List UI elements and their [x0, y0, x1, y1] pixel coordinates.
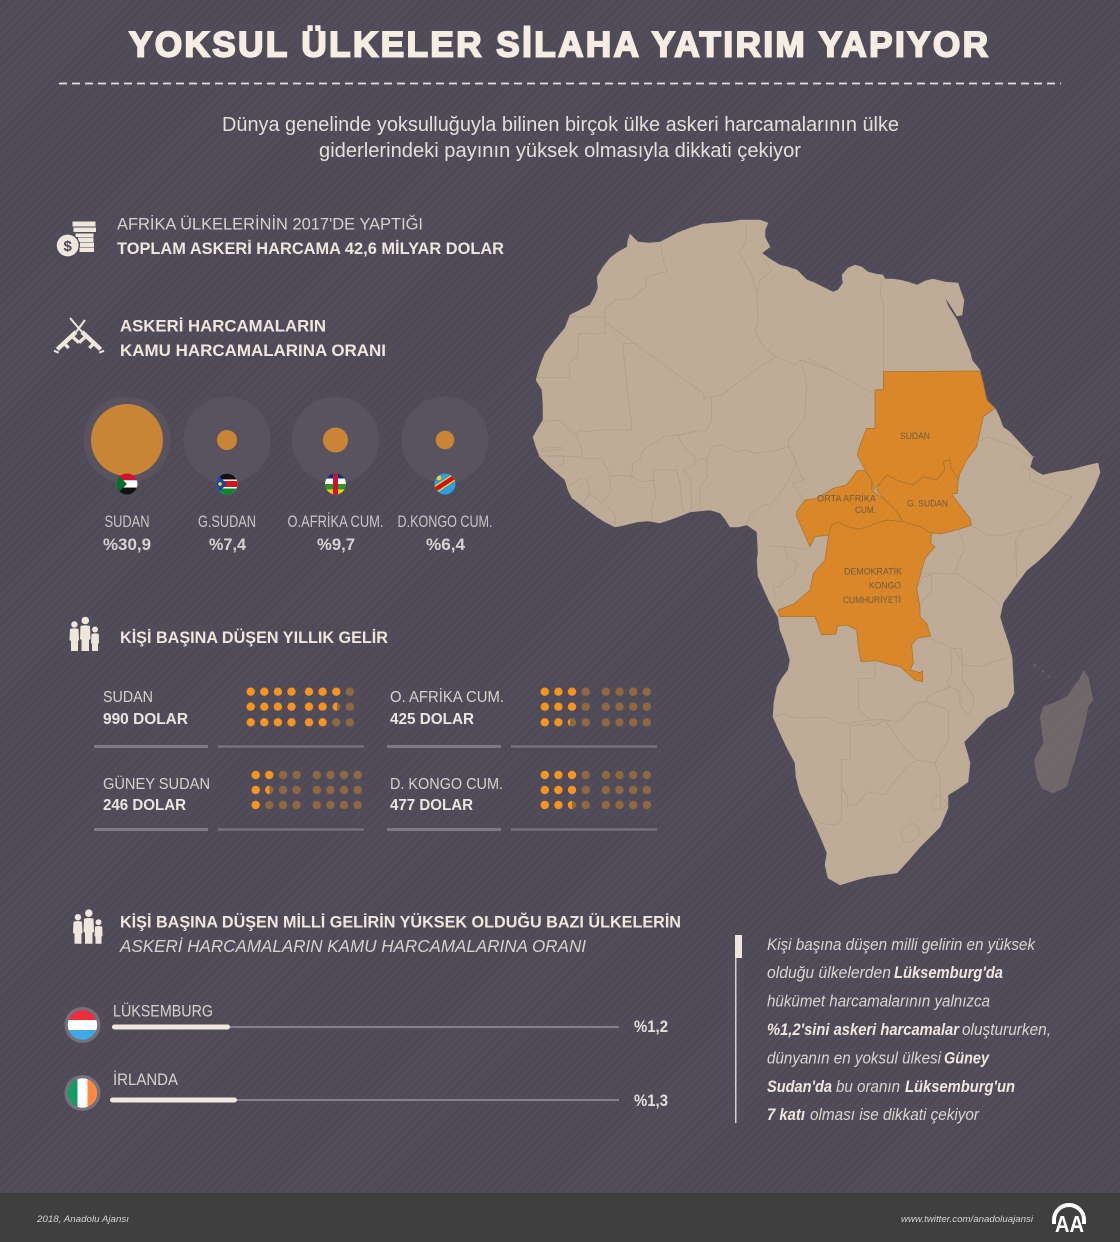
bubble labels: [104, 512, 492, 531]
callout: oluştururken,: [962, 1020, 1051, 1039]
icon: people: [70, 617, 99, 651]
income: Sudan: [94, 688, 364, 748]
label: G. Sudan: G. SUDAN: [907, 498, 948, 508]
map of Africa: [533, 220, 1100, 885]
country: Sudan: [857, 371, 995, 490]
total spending text: [117, 214, 504, 258]
country: South Sudan: [877, 460, 972, 534]
callout: %1,2'sini askeri harcamalar: [767, 1020, 960, 1039]
label: Sudan: SUDAN: [900, 431, 930, 441]
Africa landmass: [533, 220, 1100, 885]
intro text: [222, 114, 899, 162]
central and east africa borders: [770, 278, 1072, 605]
income: DR Congo: [387, 771, 657, 831]
callout: olduğu ülkelerden: [767, 963, 891, 982]
title: YOKSUL ÜLKELER SİLAHA YATIRIM YAPIYOR: [129, 26, 988, 64]
footer: www.twitter.com/anadoluajansi: [901, 1214, 1034, 1225]
dot chart: Sudan: [246, 688, 354, 726]
bar: Ireland: %1,3: [634, 1092, 668, 1110]
heading: high income countries: ASKERİ HARCAMALARIN KAMU HARCAMALARINA ORANI: [119, 936, 586, 956]
label: DR Congo: DEMOKRATİK: [844, 566, 902, 576]
icon: AA logo: AA: [1055, 1211, 1084, 1237]
income: Central African Republic: O. AFRİKA CUM.: [390, 687, 504, 706]
flag: DR Congo: [434, 474, 456, 494]
callout: [735, 935, 1051, 1124]
callout: Sudan'da: [767, 1077, 832, 1096]
label: Orta Afrika Cum.: CUM.: [855, 505, 876, 515]
bubble: South Sudan: [184, 396, 270, 484]
heading: high income countries: KİŞİ BAŞINA DÜŞEN MİLLİ GELİRİN YÜKSEK OLDUĞU BAZI ÜLKELERİN: [120, 912, 681, 932]
bubble: Central African Republic: [292, 396, 379, 484]
bubble values: [103, 536, 466, 554]
heading: military spending ratio: KAMU HARCAMALARINA ORANI: [120, 341, 386, 360]
heading: military spending ratio: [120, 316, 386, 360]
income: Sudan: SUDAN: [103, 689, 153, 706]
bubble values: %30,9: [103, 536, 151, 554]
bar: Ireland: [64, 1070, 668, 1111]
icon: coins: [56, 222, 96, 257]
flag: Ireland: [64, 1075, 100, 1111]
income: South Sudan: [94, 771, 364, 831]
bar: Ireland: İRLANDA: [113, 1070, 178, 1089]
total spending text: AFRİKA ÜLKELERİNİN 2017'DE YAPTIĞI: [117, 214, 423, 234]
flag: Luxembourg: [64, 1007, 100, 1043]
income: Central African Republic: [387, 687, 657, 748]
southern africa borders: [774, 638, 1012, 843]
dot chart: South Sudan: [252, 771, 362, 809]
income: South Sudan: 246 DOLAR: [103, 797, 186, 814]
label: Orta Afrika Cum.: ORTA AFRİKA: [817, 494, 876, 504]
dot chart: Central African Republic: [541, 688, 651, 726]
callout: Güney: [944, 1048, 990, 1068]
map labels: [817, 431, 948, 605]
label: Orta Afrika Cum.: [817, 494, 876, 515]
callout: bu oranın: [836, 1077, 900, 1096]
total spending text: TOPLAM ASKERİ HARCAMA 42,6 MİLYAR DOLAR: [117, 239, 504, 258]
income: Central African Republic: 425 DOLAR: [390, 711, 474, 728]
bubble: Sudan: [84, 396, 170, 484]
income: South Sudan: GÜNEY SUDAN: [103, 775, 210, 793]
heading: military spending ratio: ASKERİ HARCAMALARIN: [120, 316, 326, 336]
income: DR Congo: 477 DOLAR: [390, 797, 473, 814]
intro text: Dünya genelinde yoksulluğuyla bilinen birçok ülke askeri harcamalarının ülke: [222, 114, 899, 136]
bar: Luxembourg: [64, 1002, 668, 1043]
bubble values: %9,7: [317, 536, 355, 554]
heading: high income countries: [119, 912, 681, 956]
footer: [0, 1193, 1120, 1242]
callout: 7 katı: [767, 1105, 805, 1124]
flag: Central African Republic: [325, 474, 346, 494]
label: DR Congo: KONGO: [869, 580, 901, 590]
income: Sudan: 990 DOLAR: [103, 711, 188, 728]
bubble: DR Congo: [402, 396, 488, 484]
highlighted countries: [778, 371, 995, 682]
label: DR Congo: CUMHURİYETİ: [843, 595, 901, 605]
bar: Luxembourg: %1,2: [634, 1018, 668, 1036]
income: DR Congo: D. KONGO CUM.: [390, 776, 503, 793]
bubble labels: SUDAN: [104, 513, 150, 531]
bubble labels: G.SUDAN: [198, 513, 256, 531]
heading: annual income per person: KİŞİ BAŞINA DÜŞEN YILLIK GELİR: [120, 628, 388, 647]
island: Madagascar: [1034, 664, 1093, 793]
callout: Lüksemburg'da: [894, 963, 1003, 982]
west africa borders: [537, 223, 830, 527]
footer: 2018, Anadolu Ajansı: [36, 1214, 129, 1225]
callout: hükümet harcamalarının yalnızca: [767, 992, 990, 1010]
callout: dünyanın en yoksul ülkesi: [767, 1048, 942, 1068]
bar: Luxembourg: LÜKSEMBURG: [113, 1002, 213, 1020]
country: DR Congo: [778, 520, 935, 682]
bubble values: %6,4: [426, 536, 466, 554]
flag: South Sudan: [216, 473, 238, 495]
bubble values: %7,4: [209, 536, 247, 554]
icon: coins: $: [64, 238, 73, 255]
bubble labels: O.AFRİKA CUM.: [288, 512, 384, 531]
callout: Kişi başına düşen milli gelirin en yüksek: [767, 935, 1036, 954]
label: DR Congo: [843, 566, 902, 605]
intro text: giderlerindeki payının yüksek olmasıyla dikkati çekiyor: [319, 140, 801, 162]
country: Central African Republic: [797, 471, 902, 547]
icon: people (lower): [73, 909, 102, 944]
icon: crossed rifles: [54, 318, 104, 353]
callout: olması ise dikkati çekiyor: [810, 1105, 980, 1124]
flag: Sudan: [116, 473, 138, 495]
callout: Lüksemburg'un: [905, 1077, 1015, 1096]
bubble chart: spending ratio: [84, 396, 492, 554]
bubble labels: D.KONGO CUM.: [398, 513, 492, 531]
dot chart: DR Congo: [541, 771, 651, 809]
